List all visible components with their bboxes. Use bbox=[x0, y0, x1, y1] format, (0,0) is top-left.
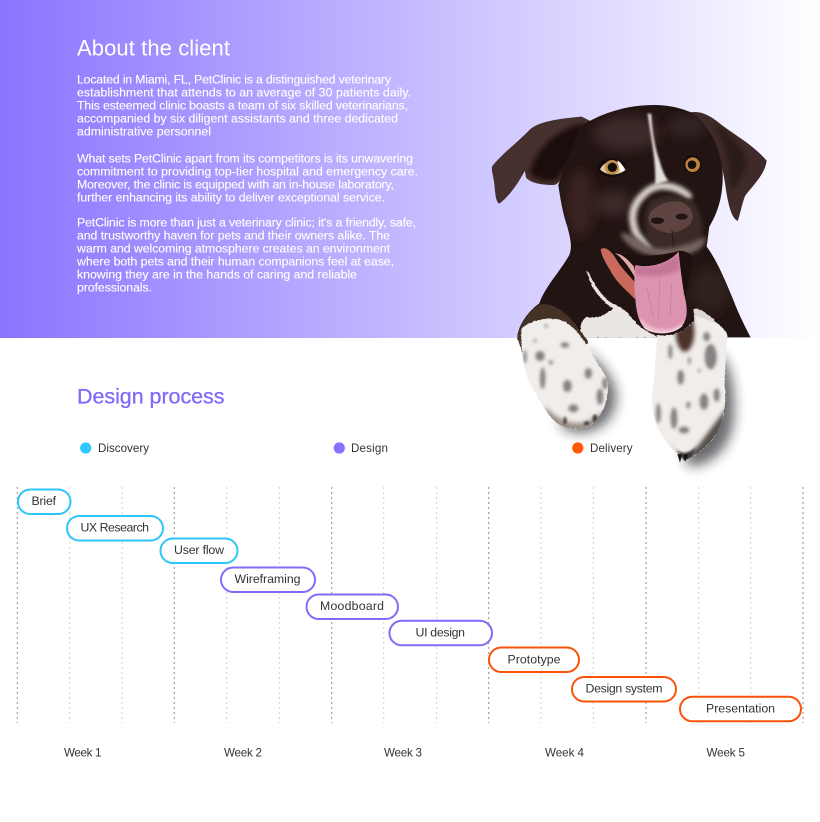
task: User flow: User flow bbox=[174, 543, 224, 557]
legend item: discovery: Discovery bbox=[98, 442, 149, 455]
eye: left bbox=[597, 158, 627, 177]
left ear bbox=[492, 117, 592, 204]
week axis labels bbox=[64, 746, 745, 760]
task: UX Research bbox=[67, 516, 163, 540]
task: Design system: Design system bbox=[586, 682, 662, 696]
illustration: dog bbox=[492, 105, 767, 467]
eye: right bbox=[684, 155, 702, 173]
head shading bbox=[565, 117, 730, 313]
paw claws bbox=[677, 454, 688, 463]
task: User flow bbox=[160, 538, 238, 563]
task: Wireframing: Wireframing bbox=[234, 572, 301, 586]
blaze and muzzle markings bbox=[620, 113, 705, 257]
task: Brief bbox=[18, 490, 70, 514]
mouth bbox=[601, 248, 693, 303]
chest fur bbox=[580, 270, 727, 343]
text block: paragraph 1: establishment that attends to an average of 30 patients daily. bbox=[77, 85, 411, 99]
text block: paragraph 1: Located in Miami, FL, PetClinic is a distinguished veterinary bbox=[77, 72, 392, 86]
task: Moodboard bbox=[306, 594, 398, 619]
text block: paragraph 2 bbox=[77, 151, 418, 204]
text block: paragraph 1 bbox=[77, 72, 411, 138]
text block: paragraph 1: accompanied by six diligent assistants and three dedicated bbox=[77, 112, 398, 126]
week axis labels: Week 1 bbox=[64, 746, 102, 760]
text block: paragraph 3: professionals. bbox=[77, 281, 152, 295]
text block: paragraph 2: further enhancing its ability to deliver exceptional service. bbox=[77, 190, 385, 204]
task: Wireframing bbox=[221, 568, 315, 592]
task: Prototype: Prototype bbox=[508, 652, 561, 666]
task: UI design bbox=[390, 621, 492, 645]
panel: about the client bbox=[76, 36, 418, 295]
task: Presentation: Presentation bbox=[706, 702, 775, 716]
legend bbox=[80, 442, 633, 455]
heading: about the client: About the client bbox=[77, 36, 230, 60]
week axis labels: Week 3 bbox=[384, 746, 422, 760]
paw shadows bbox=[560, 350, 734, 467]
task: Brief: Brief bbox=[32, 494, 57, 508]
right paw spots bbox=[654, 318, 724, 460]
body bbox=[517, 105, 751, 337]
left paw fur bbox=[517, 304, 608, 429]
week axis labels: Week 4 bbox=[545, 746, 585, 760]
heading: design process: Design process bbox=[77, 384, 224, 408]
right ear shading bbox=[713, 123, 746, 190]
right paw fur bbox=[652, 317, 727, 461]
task: Moodboard: Moodboard bbox=[320, 599, 384, 613]
timeline chart bbox=[17, 487, 803, 723]
grid lines bbox=[17, 487, 803, 723]
task: Design system bbox=[572, 677, 676, 702]
nose bbox=[648, 201, 693, 247]
legend item: design: Design bbox=[351, 442, 388, 455]
week axis labels: Week 2 bbox=[224, 746, 262, 760]
text block: paragraph 1: This esteemed clinic boasts a team of six skilled veterinarians, bbox=[77, 98, 408, 112]
text block: paragraph 2: What sets PetClinic apart from its competitors is its unwavering bbox=[77, 151, 413, 165]
task: Prototype bbox=[489, 648, 579, 672]
text block: paragraph 3 bbox=[76, 216, 416, 295]
task: Presentation bbox=[680, 697, 801, 721]
left paw spots bbox=[523, 325, 608, 437]
text block: paragraph 3: and trustworthy haven for pets and their owners alike. The bbox=[77, 229, 390, 243]
hero gradient banner bbox=[0, 0, 820, 338]
text block: paragraph 2: commitment to providing top-tier hospital and emergency care. bbox=[77, 164, 418, 178]
text block: paragraph 3: where both pets and their human companions feel at ease, bbox=[76, 255, 394, 269]
legend item: design bbox=[334, 442, 388, 455]
text block: paragraph 3: warm and welcoming atmosphere creates an environment bbox=[76, 242, 391, 256]
legend item: delivery: Delivery bbox=[590, 442, 633, 455]
task: UI design: UI design bbox=[416, 626, 465, 640]
week axis labels: Week 5 bbox=[706, 746, 745, 760]
text block: paragraph 1: administrative personnel bbox=[77, 124, 211, 138]
text block: paragraph 3: PetClinic is more than just a veterinary clinic; it's a friendly, safe, bbox=[77, 216, 416, 230]
task: UX Research: UX Research bbox=[80, 520, 149, 534]
right ear bbox=[689, 112, 767, 221]
tongue bbox=[634, 252, 687, 337]
text block: paragraph 3: knowing they are in the hands of caring and reliable bbox=[77, 268, 357, 282]
text block: paragraph 2: Moreover, the clinic is equipped with an in-house laboratory, bbox=[77, 178, 394, 192]
left ear shading bbox=[530, 123, 583, 181]
